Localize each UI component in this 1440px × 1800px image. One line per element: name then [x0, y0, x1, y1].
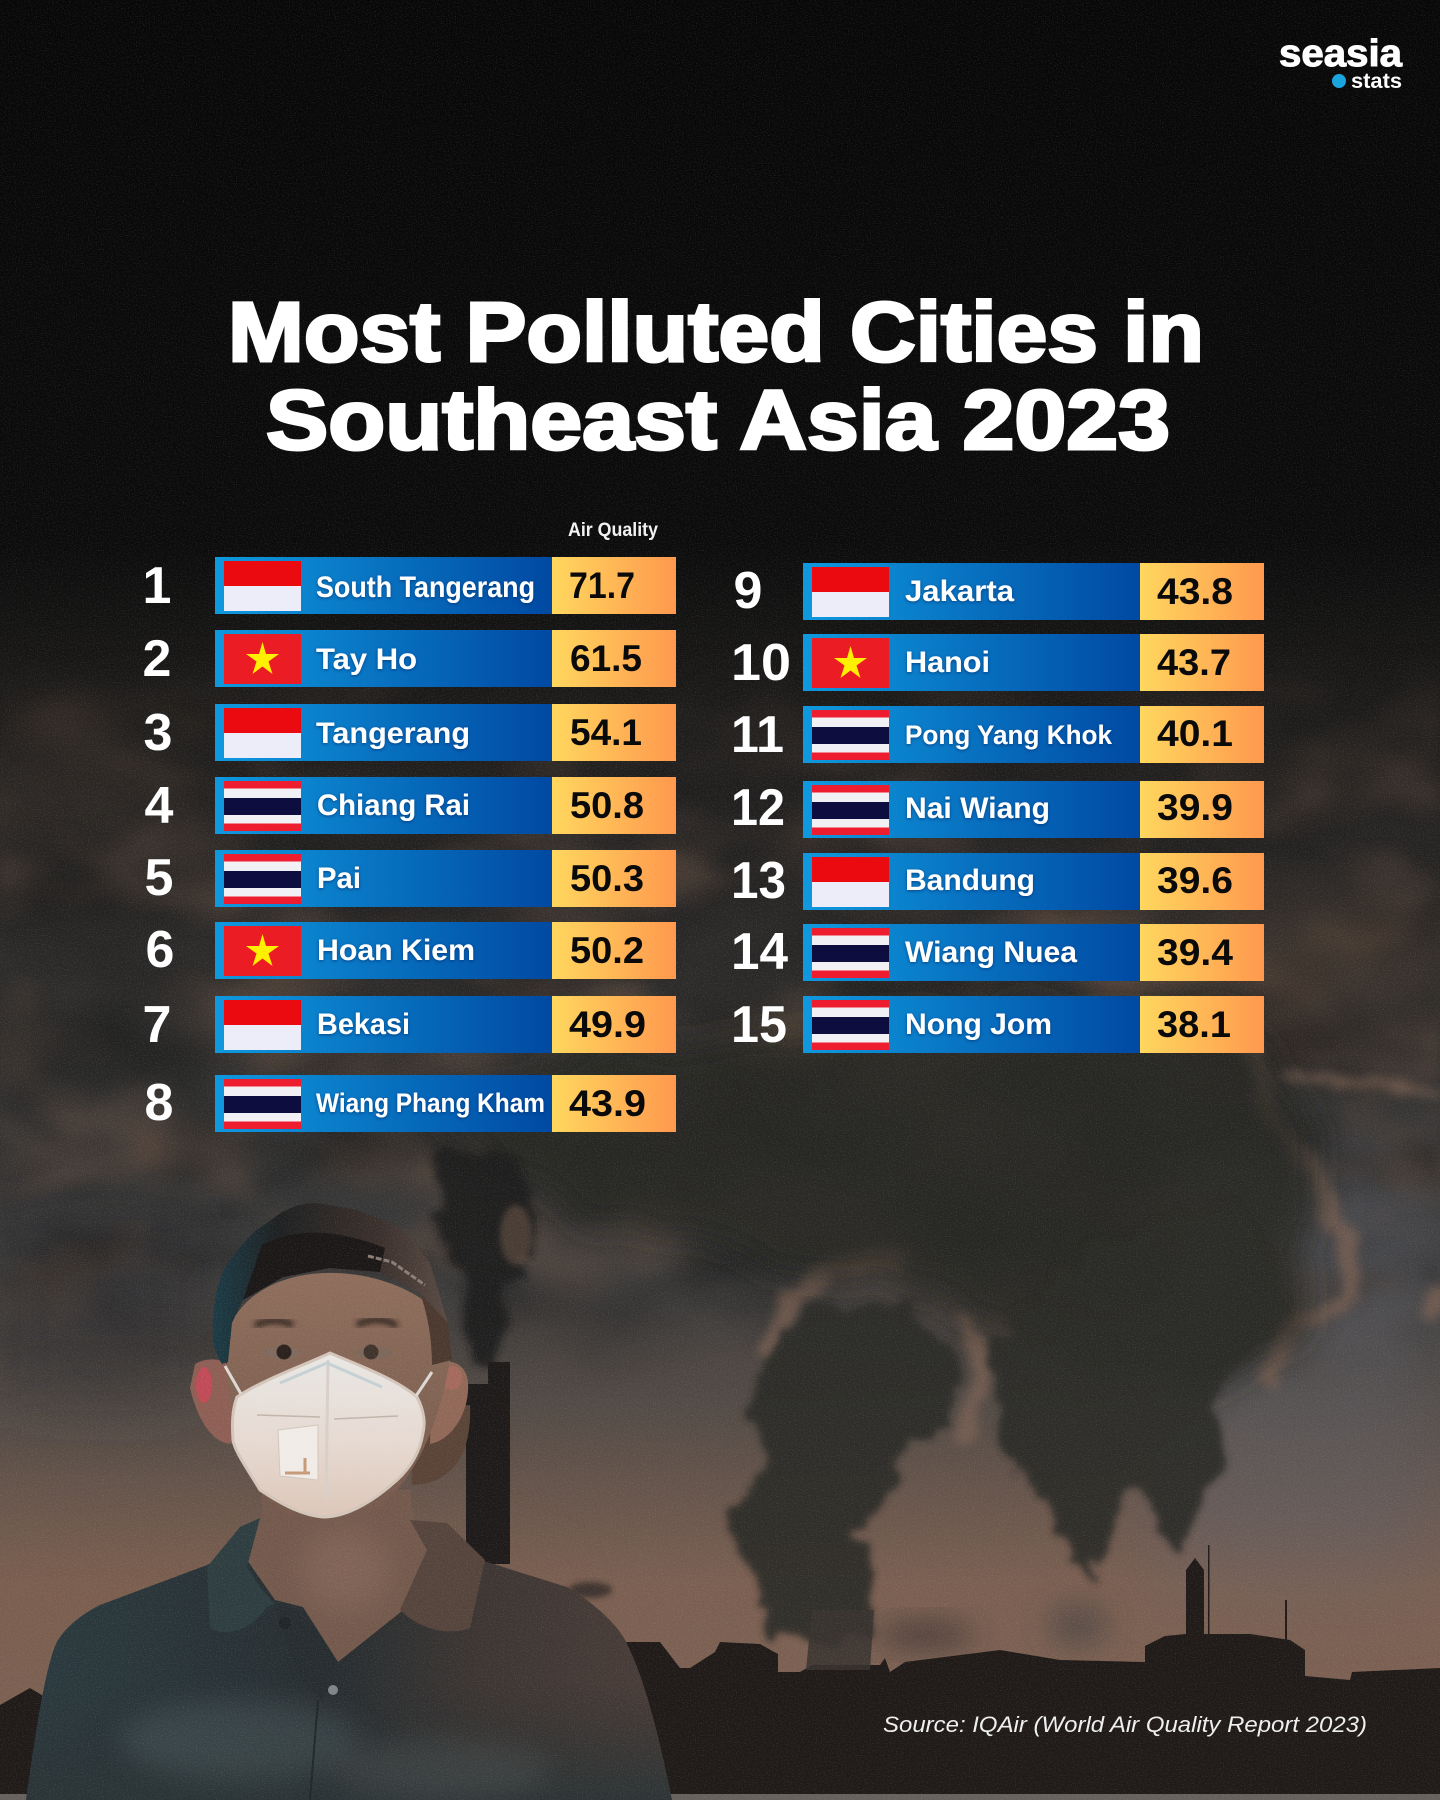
ranking row 3: Tangerang: Tangerang	[316, 717, 470, 750]
hair at temple	[420, 1293, 452, 1365]
chimney silhouette	[466, 1362, 510, 1564]
ranking row 12: Nai Wiang: 12	[731, 779, 785, 837]
shirt buttons	[279, 1617, 291, 1629]
ranking row 12: Nai Wiang: Nai Wiang	[905, 792, 1050, 825]
ranking row 4: Chiang Rai: Chiang Rai	[317, 789, 470, 822]
eyes and brows	[255, 1321, 293, 1326]
ranking row 1: South Tangerang: 1	[143, 557, 171, 615]
ranking row 13: Bandung: Bandung	[905, 864, 1035, 897]
face	[227, 1273, 450, 1515]
ranking row 3: Tangerang	[144, 704, 676, 762]
ranking row 8: Wiang Phang Kham	[145, 1074, 676, 1132]
ranking row 14: Wiang Nuea: 14	[731, 923, 788, 981]
ranking row 4: Chiang Rai: 4	[145, 777, 174, 835]
cap	[213, 1203, 448, 1364]
smoke plumes	[430, 1010, 1440, 1649]
ranking row 7: Bekasi: 49.9	[569, 1004, 646, 1045]
ranking row 10: Hanoi	[731, 634, 1264, 692]
ranking row 2: Tay Ho: 61.5	[570, 638, 642, 679]
main upper smoke mass	[430, 1010, 1325, 1395]
ranking row 5: Pai	[145, 849, 676, 907]
ranking row 2: Tay Ho: 2	[143, 630, 171, 688]
logo: seasia stats: stats	[1351, 70, 1402, 93]
ranking row 1: South Tangerang: South Tangerang	[316, 571, 535, 604]
ranking row 3: Tangerang: 54.1	[570, 712, 642, 753]
title: Most Polluted Cities in	[228, 285, 1204, 379]
ranking row 7: Bekasi: 7	[143, 996, 171, 1054]
logo: seasia stats	[1279, 33, 1403, 93]
background: polluted sky	[0, 589, 1440, 1705]
logo: seasia stats: seasia	[1279, 33, 1403, 75]
ranking row 4: Chiang Rai	[145, 777, 676, 835]
lit smoke edges	[770, 1040, 1440, 1440]
ranking row 8: Wiang Phang Kham: Wiang Phang Kham	[316, 1088, 545, 1118]
ranking row 4: Chiang Rai: 50.8	[570, 785, 644, 826]
ranking row 15: Nong Jom	[731, 996, 1264, 1054]
ranking row 14: Wiang Nuea: 39.4	[1157, 932, 1233, 973]
ranking row 13: Bandung: 39.6	[1157, 860, 1233, 901]
ranking row 15: Nong Jom: 15	[731, 996, 787, 1054]
ranking row 6: Hoan Kiem	[146, 921, 676, 979]
ranking row 15: Nong Jom: Nong Jom	[905, 1008, 1052, 1041]
ranking row 11: Pong Yang Khok: 11	[731, 706, 784, 764]
ranking row 1: South Tangerang	[143, 557, 676, 615]
head back fragment	[410, 1405, 470, 1485]
city skyline silhouette	[0, 1545, 1440, 1800]
ranking row 13: Bandung: 13	[731, 852, 786, 910]
ranking row 1: South Tangerang: 71.7	[569, 565, 635, 606]
ranking row 6: Hoan Kiem: Hoan Kiem	[317, 934, 475, 967]
ranking row 5: Pai: 50.3	[570, 858, 644, 899]
chimney smoke	[436, 1150, 535, 1362]
ranking row 9: Jakarta: Jakarta	[905, 575, 1014, 608]
ranking row 14: Wiang Nuea	[731, 923, 1264, 981]
ranking row 14: Wiang Nuea: Wiang Nuea	[905, 936, 1077, 969]
column heading: Air Quality: Air Quality	[568, 520, 658, 541]
ranking row 15: Nong Jom: 38.1	[1157, 1004, 1231, 1045]
ranking row 10: Hanoi: 10	[731, 634, 791, 692]
ranking row 9: Jakarta: 9	[734, 562, 762, 620]
ranking row 5: Pai: Pai	[317, 862, 361, 895]
ranking row 13: Bandung	[731, 852, 1264, 910]
ranking row 11: Pong Yang Khok	[731, 706, 1264, 764]
shirt collars	[207, 1518, 275, 1632]
ranking row 10: Hanoi: Hanoi	[905, 646, 990, 679]
ranking row 6: Hoan Kiem: 6	[146, 921, 174, 979]
person wearing a face mask	[26, 1203, 672, 1800]
ranking row 5: Pai: 5	[145, 849, 173, 907]
ranking row 7: Bekasi	[143, 996, 676, 1054]
ranking row 7: Bekasi: Bekasi	[317, 1008, 410, 1041]
neck	[247, 1490, 441, 1662]
source note: Source: IQAir (World Air Quality Report 2023)	[883, 1712, 1367, 1737]
ranking row 8: Wiang Phang Kham: 8	[145, 1074, 173, 1132]
right double plume	[990, 1200, 1290, 1582]
ranking row 12: Nai Wiang	[731, 779, 1264, 838]
left plume	[725, 1306, 960, 1640]
shirt	[26, 1540, 672, 1800]
ranking row 10: Hanoi: 43.7	[1157, 642, 1231, 683]
mask	[232, 1353, 424, 1517]
ranking row 2: Tay Ho	[143, 630, 676, 688]
ranking row 9: Jakarta	[734, 562, 1264, 620]
title	[228, 285, 1204, 467]
title: Southeast Asia 2023	[266, 373, 1170, 467]
ranking row 12: Nai Wiang: 39.9	[1157, 787, 1233, 828]
ranking row 8: Wiang Phang Kham: 43.9	[569, 1083, 646, 1124]
icon: logo dot	[1332, 74, 1346, 88]
ranking row 9: Jakarta: 43.8	[1157, 571, 1233, 612]
shirt placket	[275, 1607, 338, 1700]
smoke over shirt	[120, 1700, 360, 1780]
ears	[190, 1359, 236, 1444]
ranking row 11: Pong Yang Khok: 40.1	[1157, 713, 1233, 754]
ranking row 11: Pong Yang Khok: Pong Yang Khok	[905, 720, 1113, 750]
ranking row 6: Hoan Kiem: 50.2	[570, 930, 644, 971]
ranking row 3: Tangerang: 3	[144, 704, 172, 762]
ranking row 2: Tay Ho: Tay Ho	[316, 643, 417, 676]
